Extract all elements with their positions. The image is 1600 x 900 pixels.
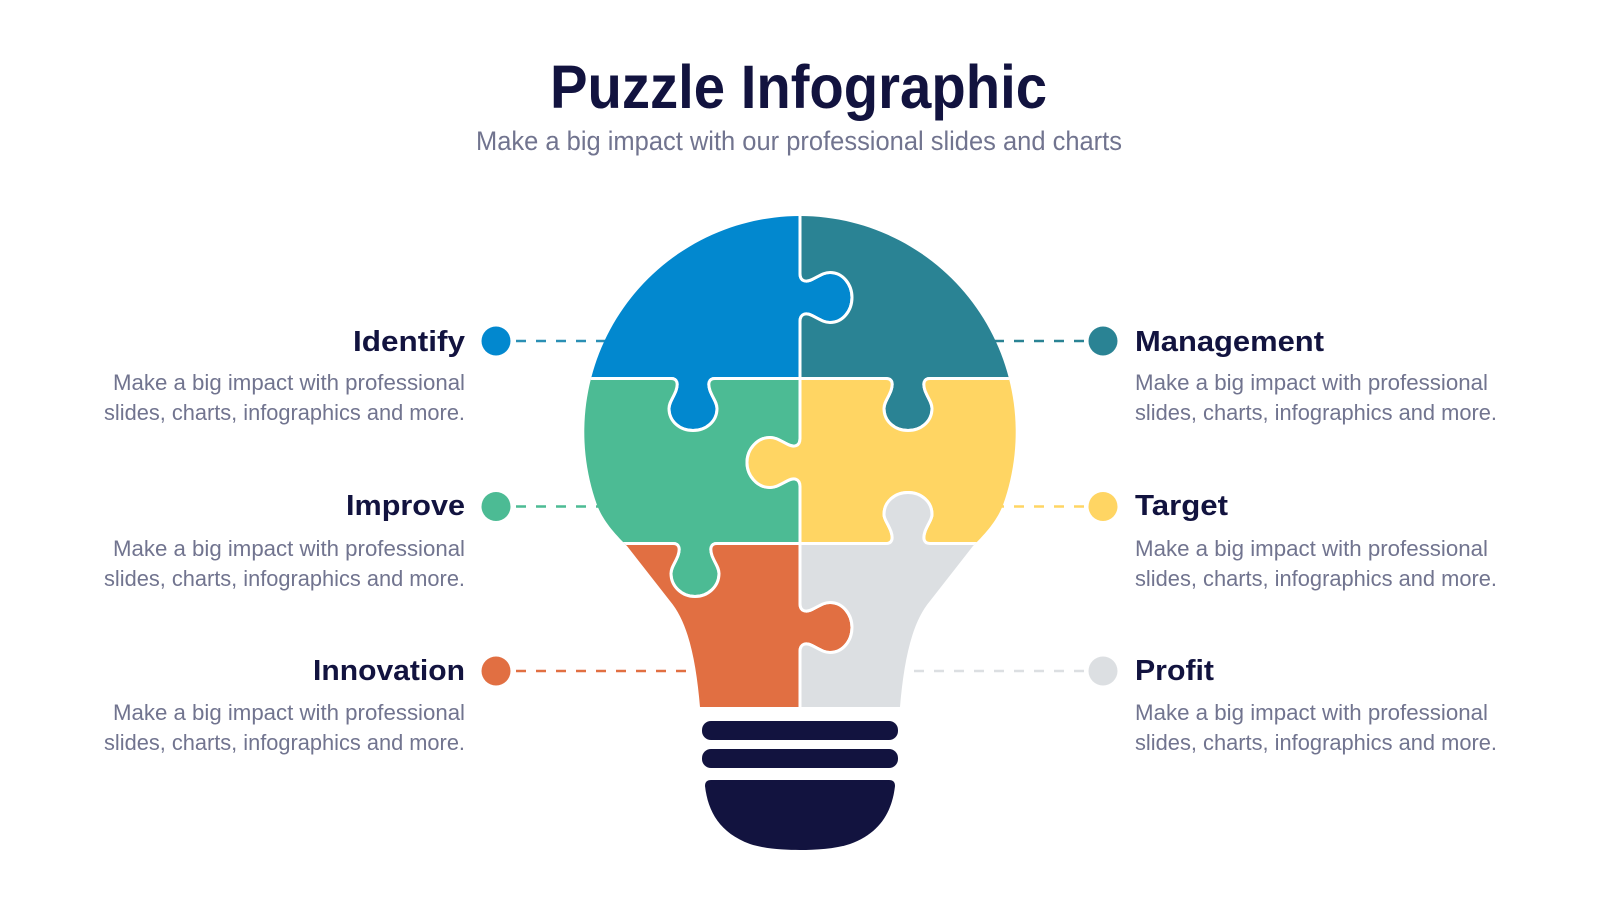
item: Innovation [104, 655, 690, 755]
connector: Target [990, 505, 1084, 508]
base ring 1 [702, 721, 898, 740]
description: Improve: Make a big impact with professional [113, 536, 465, 561]
dot: Management [1088, 326, 1118, 356]
connector: Management [990, 340, 1084, 342]
description: Identify [104, 370, 465, 425]
description: Profit: slides, charts, infographics and more. [1135, 730, 1497, 755]
puzzle piece: grey [798, 491, 976, 707]
connector: Improve [516, 505, 610, 508]
description: Management [1135, 370, 1497, 425]
description: Profit: Make a big impact with professional [1135, 700, 1488, 725]
heading: Innovation: Innovation [313, 655, 465, 687]
connector: Identify [516, 340, 610, 342]
dot: Innovation [482, 656, 510, 686]
description: Target: Make a big impact with professional [1135, 536, 1488, 561]
description: Target: slides, charts, infographics and more. [1135, 566, 1497, 591]
description: Innovation: Make a big impact with professional [113, 700, 465, 725]
description: Improve: slides, charts, infographics and more. [104, 566, 465, 591]
puzzle pieces [584, 216, 1016, 707]
description: Identify: slides, charts, infographics and more. [104, 400, 465, 425]
puzzle piece: yellow [747, 378, 1040, 544]
base cap [705, 780, 895, 850]
puzzle piece: green [584, 377, 798, 595]
heading: Target: Target [1135, 490, 1228, 522]
description: Improve [104, 536, 465, 591]
heading: Profit: Profit [1135, 655, 1214, 687]
description: Target [1135, 536, 1497, 591]
item: Identify [104, 326, 610, 425]
item: Management [990, 326, 1497, 425]
puzzle piece: teal [798, 216, 1009, 429]
heading: Identify: Identify [353, 326, 465, 358]
dot: Improve [482, 492, 510, 521]
connector: Innovation [516, 670, 690, 672]
heading: Management: Management [1135, 326, 1324, 358]
subtitle: Make a big impact with our professional slides and charts [476, 126, 1122, 156]
description: Profit [1135, 700, 1497, 755]
description: Management: Make a big impact with professional [1135, 370, 1488, 395]
bulb base [702, 721, 898, 850]
dot: Profit [1088, 656, 1118, 686]
puzzle piece: orange [623, 542, 850, 707]
description: Identify: Make a big impact with professional [113, 370, 465, 395]
description: Management: slides, charts, infographics and more. [1135, 400, 1497, 425]
dot: Identify [482, 326, 510, 356]
light bulb puzzle [584, 216, 1016, 850]
base ring 2 [702, 749, 898, 768]
dot: Target [1088, 492, 1118, 521]
title: Puzzle Infographic [550, 53, 1047, 121]
description: Innovation: slides, charts, infographics and more. [104, 730, 465, 755]
puzzle piece: blue [591, 216, 850, 429]
heading: Improve: Improve [346, 490, 465, 522]
puzzle glass [584, 216, 1016, 707]
item: Profit [910, 655, 1497, 755]
description: Innovation [104, 700, 465, 755]
connector: Profit [910, 670, 1084, 672]
infographic canvas [104, 64, 1495, 850]
item: Target [990, 490, 1497, 591]
item: Improve [104, 490, 610, 591]
